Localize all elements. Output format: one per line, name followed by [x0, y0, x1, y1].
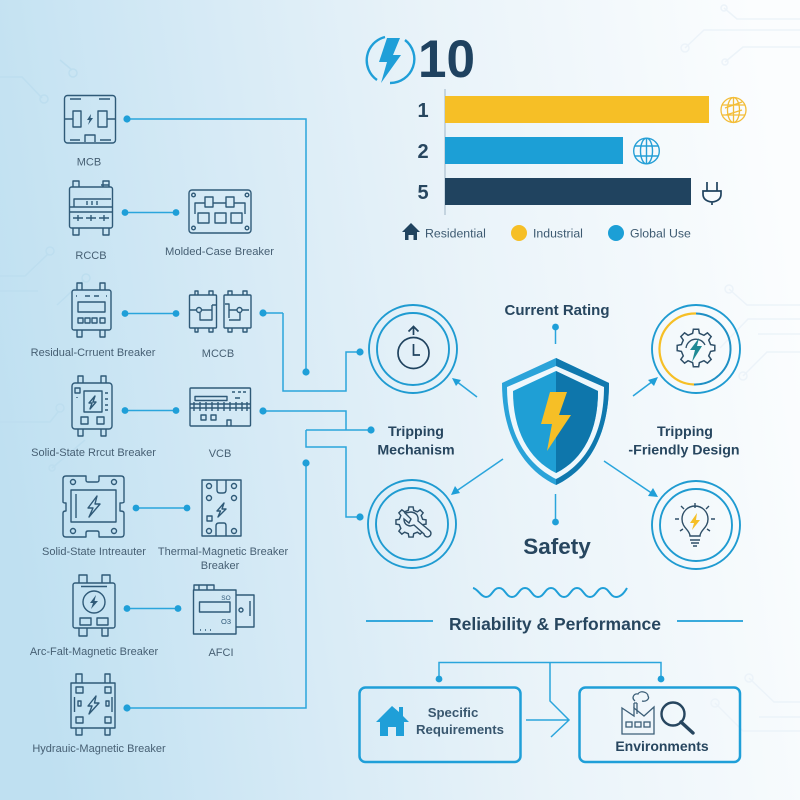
panel: reliability and performance: [360, 588, 743, 762]
text: specific requirements: Specific: [428, 705, 478, 720]
legend: Residential: [425, 226, 486, 240]
chart: horizontal bars: 1: [417, 100, 429, 122]
legend: [402, 223, 691, 241]
arrow: to timer: [452, 378, 477, 397]
icon: timer: [369, 305, 457, 393]
icon: AFCI: [194, 585, 254, 634]
icon: AFCI: SO: [221, 595, 231, 602]
icon: gear with bolt: [652, 305, 740, 393]
heading: current rating: Current Rating: [504, 302, 610, 319]
icon: RCCB: [70, 181, 112, 235]
label: tripping-friendly design: Tripping: [657, 424, 713, 440]
label: solid-state interrupter: Solid-State Intreauter: [42, 546, 146, 558]
legend: Industrial: [533, 226, 583, 240]
icon: shield with bolt: [502, 358, 609, 485]
arrow: to wrench: [451, 459, 503, 495]
label: RCCB: RCCB: [75, 250, 107, 262]
legend: Global Use: [630, 226, 691, 240]
heading rules: [366, 620, 743, 622]
label: thermal-magnetic breaker: Thermal-Magnetic Breaker: [158, 546, 288, 558]
icon: AFCI: O3: [221, 617, 231, 626]
connector tree: [436, 662, 664, 737]
icon: VCB: [190, 388, 250, 426]
icon: plug: [703, 182, 721, 205]
label: tripping mechanism: Tripping: [388, 424, 444, 440]
text: specific requirements: Requirements: [416, 722, 504, 737]
arrow: to gear: [633, 377, 658, 396]
label: molded-case breaker: Molded-Case Breaker: [165, 246, 274, 258]
label: tripping-friendly design: -Friendly Design: [628, 442, 740, 458]
label: thermal-magnetic breaker: Breaker: [201, 560, 240, 572]
heading: reliability and performance: Reliability & Performance: [449, 614, 661, 634]
icon: residual-current breaker: [72, 283, 111, 337]
label: hydraulic-magnetic breaker: Hydrauic-Magnetic Breaker: [32, 743, 166, 755]
panel: usage bar chart: [367, 30, 746, 241]
icon: arc-fault breaker: [73, 575, 115, 636]
connector: interrupter to thermal-magnetic: [133, 505, 190, 511]
connector: arc-fault to AFCI: [124, 605, 181, 612]
label: AFCI: AFCI: [208, 647, 234, 659]
panel: safety hub: [368, 302, 740, 569]
text: environments: Environments: [615, 738, 709, 754]
icon: yellow globe: [721, 98, 746, 122]
connector: solid-state to VCB: [122, 407, 179, 414]
icon: hydraulic-magnetic breaker: [71, 674, 115, 735]
icon: magnifier: [662, 702, 693, 733]
chart: horizontal bars: 5: [417, 182, 429, 204]
label: tripping mechanism: Mechanism: [377, 442, 455, 458]
connector: RCCB to molded-case: [122, 209, 179, 216]
icon: gear with wrench: [368, 480, 456, 568]
card: environments: [580, 688, 740, 762]
label: MCB: MCB: [77, 156, 101, 168]
decorative wave: [473, 588, 627, 597]
chart: horizontal bars: 2: [417, 141, 429, 163]
connector: residual to MCCB: [122, 310, 179, 317]
chart: horizontal bars: [417, 89, 709, 215]
icon: lightning bolt badge: [367, 37, 414, 83]
label: arc-fault breaker: Arc-Falt-Magnetic Breaker: [30, 646, 159, 658]
icon: thermal-magnetic breaker: [202, 480, 241, 536]
card: specific requirements: [360, 688, 520, 762]
stem: current rating: [552, 324, 559, 344]
icon: light bulb: [652, 481, 740, 569]
icon: blue globe: [634, 138, 659, 164]
arrow: to bulb: [604, 461, 658, 497]
stem: safety: [552, 494, 559, 525]
panel: breaker types: [30, 96, 288, 755]
icon: MCCB: [190, 291, 251, 332]
label: VCB: VCB: [209, 448, 231, 460]
icon: solid-state interrupter: [63, 476, 124, 537]
icon: molded-case breaker: [189, 190, 251, 233]
label: solid-state circuit breaker: Solid-State Rrcut Breaker: [31, 447, 156, 459]
heading: safety: Safety: [523, 534, 591, 559]
heading: 10: 10: [418, 30, 475, 89]
connector lines between breakers and central hub: [123, 115, 375, 712]
icon: solid-state circuit breaker: [72, 376, 112, 436]
icon: house: [376, 706, 409, 736]
icon: factory: [622, 692, 654, 734]
label: residual-current breaker: Residual-Crruent Breaker: [31, 347, 156, 359]
label: MCCB: MCCB: [202, 348, 234, 360]
icon: MCB: [64, 96, 116, 143]
